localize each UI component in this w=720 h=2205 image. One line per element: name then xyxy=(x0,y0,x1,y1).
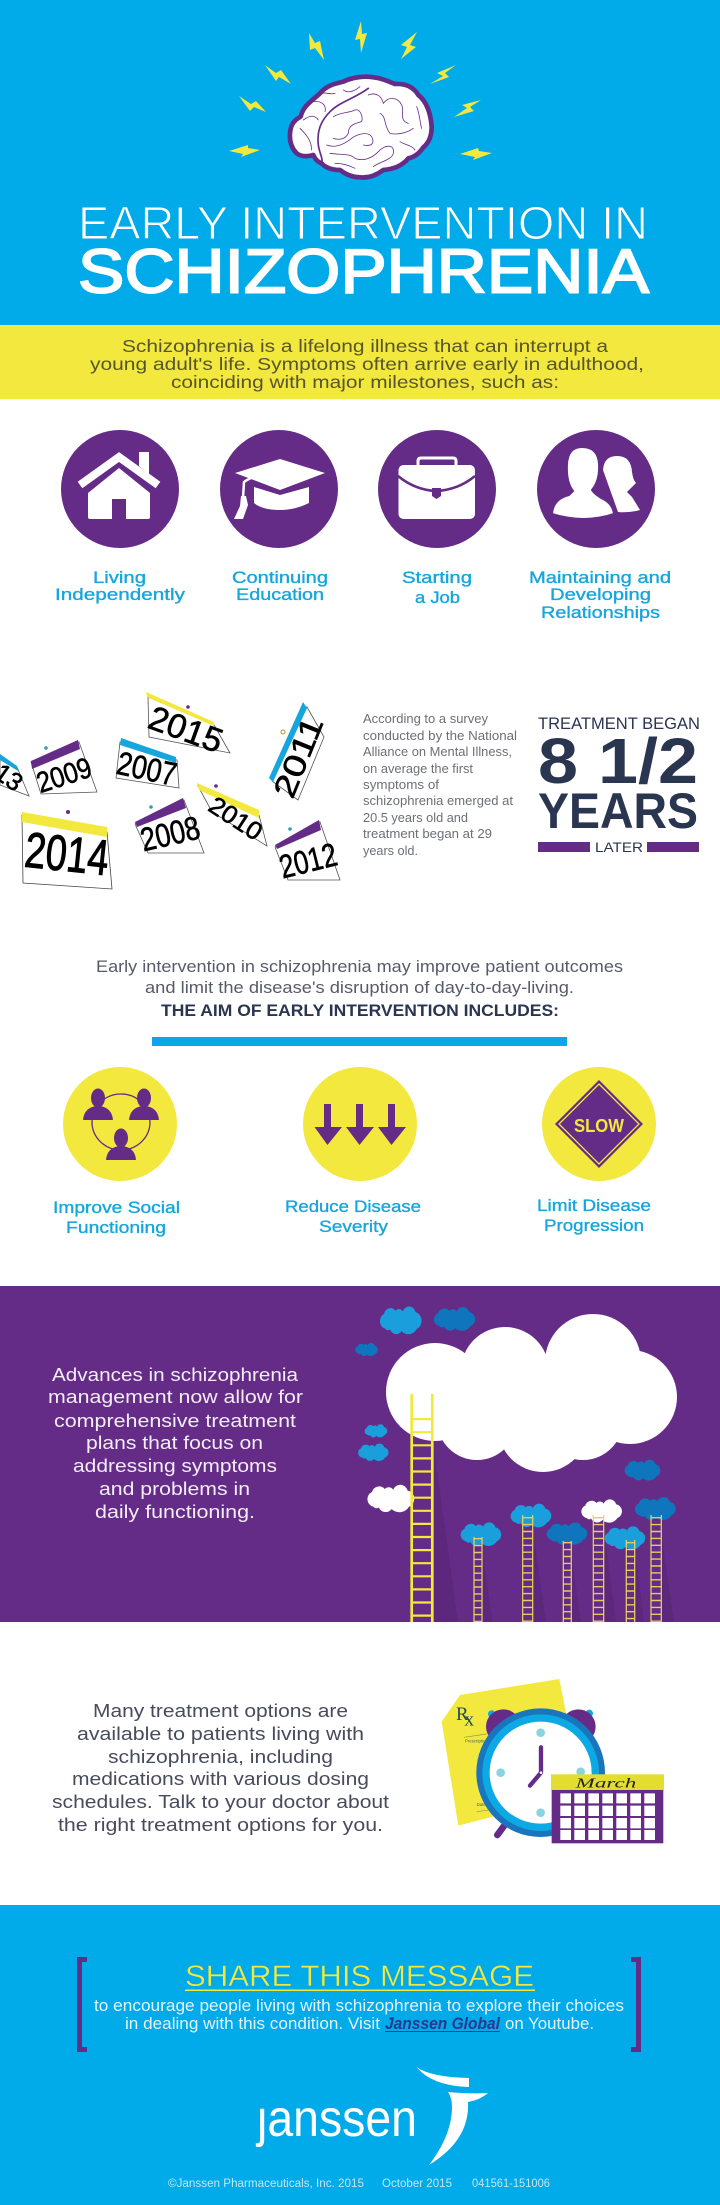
aim labels: Improve Social xyxy=(53,1198,180,1217)
illustration: ladder shadows xyxy=(433,1440,674,1622)
share text: on Youtube. xyxy=(505,2014,594,2033)
treatment options text: available to patients living with xyxy=(77,1724,364,1744)
panel: intro banner xyxy=(0,325,720,399)
panel: share message footer xyxy=(0,1905,720,2205)
logo: janssen xyxy=(255,2067,488,2165)
survey text: Alliance on Mental Illness, xyxy=(363,744,512,759)
month calendar: March xyxy=(574,1776,636,1791)
treatment options text: schizophrenia, including xyxy=(108,1747,333,1767)
milestone labels: Starting xyxy=(402,569,472,587)
calendar 2014: 2014 xyxy=(22,822,112,886)
panel: milestones xyxy=(55,430,671,622)
footer legal line: 041561-151006 xyxy=(472,2178,550,2190)
icon: house xyxy=(61,430,179,548)
alarm clock xyxy=(476,1708,605,1837)
milestone labels: a Job xyxy=(415,589,460,607)
share text: Janssen Global xyxy=(385,2014,501,2033)
intro text: Schizophrenia is a lifelong illness that can interrupt a xyxy=(122,336,608,356)
brackets xyxy=(80,1960,638,2050)
survey text: conducted by the National xyxy=(363,728,517,743)
calendar 2015: 2015 xyxy=(143,699,228,761)
logo: janssen: janssen xyxy=(255,2090,417,2148)
calendar 2008: 2008 xyxy=(137,809,204,858)
illustration: prescription, clock and calendar xyxy=(442,1679,664,1843)
aim labels: Progression xyxy=(544,1216,644,1235)
treatment options text: schedules. Talk to your doctor about xyxy=(52,1792,389,1812)
treatment options text: medications with various dosing xyxy=(72,1769,369,1789)
advances text: addressing symptoms xyxy=(73,1456,277,1476)
icon: down arrows xyxy=(303,1067,417,1181)
footer legal line xyxy=(168,2178,550,2190)
advances text: comprehensive treatment xyxy=(54,1411,296,1431)
share text: to encourage people living with schizophrenia to explore their choices xyxy=(94,1996,624,2015)
calendar 2011: 2011 xyxy=(267,712,330,803)
calendar 2007: 2007 xyxy=(114,744,180,793)
icon: briefcase xyxy=(378,430,496,548)
aim labels: Severity xyxy=(319,1217,389,1236)
aim labels: Limit Disease xyxy=(537,1196,651,1215)
footer legal line: October 2015 xyxy=(382,2178,452,2190)
calendar 2012 xyxy=(275,820,341,885)
prescription sheet: Prescription xyxy=(465,1739,488,1744)
aim labels: Reduce Disease xyxy=(285,1197,421,1216)
advances text: management now allow for xyxy=(48,1387,303,1407)
panel: header xyxy=(0,0,720,325)
survey text xyxy=(363,711,517,858)
survey text: schizophrenia emerged at xyxy=(363,793,513,808)
icon: graduation cap xyxy=(220,430,338,548)
prescription sheet xyxy=(442,1679,582,1826)
calendar 2011 xyxy=(267,702,330,803)
intro text xyxy=(90,336,644,392)
share heading: SHARE THIS MESSAGE xyxy=(185,1960,534,1993)
title xyxy=(78,197,650,306)
calendar 2009: 2009 xyxy=(33,752,96,800)
survey text: on average the first xyxy=(363,761,473,776)
milestone labels: Maintaining and xyxy=(529,569,671,587)
illustration: tall ladder xyxy=(412,1394,432,1622)
footer legal line: ©Janssen Pharmaceuticals, Inc. 2015 xyxy=(168,2178,364,2190)
illustration: short ladders xyxy=(474,1515,661,1622)
survey text: years old. xyxy=(363,843,418,858)
aim labels: Functioning xyxy=(66,1218,166,1237)
milestone labels: Relationships xyxy=(541,604,660,622)
icon: brain xyxy=(290,77,432,177)
advances text: and problems in xyxy=(99,1479,250,1499)
illustration: small clouds xyxy=(355,1306,676,1549)
calendar 2014 xyxy=(22,810,112,889)
panel: aims xyxy=(53,1067,656,1237)
title: SCHIZOPHRENIA xyxy=(78,238,650,306)
advances text xyxy=(48,1365,303,1522)
stat: treatment began 8 1/2 years later: 8 1/2 xyxy=(538,725,698,797)
illustration: big cloud xyxy=(386,1314,677,1472)
month calendar xyxy=(551,1774,664,1843)
intro text: young adult's life. Symptoms often arrive early in adulthood, xyxy=(90,354,644,374)
survey text: symptoms of xyxy=(363,777,439,792)
prescription sheet: R xyxy=(456,1704,469,1725)
milestone labels xyxy=(55,569,671,622)
intro text: coinciding with major milestones, such as: xyxy=(171,372,559,392)
share text xyxy=(94,1996,624,2033)
icon: slow sign xyxy=(542,1067,656,1181)
milestone labels: Living xyxy=(93,569,146,587)
panel: scattered year calendars xyxy=(0,692,341,889)
title: EARLY INTERVENTION IN xyxy=(78,197,648,249)
advances text: Advances in schizophrenia xyxy=(52,1365,299,1385)
stat: treatment began 8 1/2 years later: YEARS xyxy=(538,783,698,839)
early intervention statement: THE AIM OF EARLY INTERVENTION INCLUDES: xyxy=(161,1001,559,1020)
treatment options text: the right treatment options for you. xyxy=(58,1815,383,1835)
calendar 2010: 2010 xyxy=(204,791,267,846)
icon: two people xyxy=(537,430,655,548)
treatment options text xyxy=(52,1701,389,1835)
survey text: 20.5 years old and xyxy=(363,810,468,825)
survey text: treatment began at 29 xyxy=(363,826,492,841)
milestone labels: Education xyxy=(236,586,324,604)
treatment options text: Many treatment options are xyxy=(93,1701,348,1721)
icon: slow sign: SLOW xyxy=(574,1115,624,1136)
icon: lightning bolts xyxy=(229,21,492,160)
aim labels xyxy=(53,1196,651,1237)
prescription sheet: x xyxy=(464,1710,474,1731)
early intervention statement: Early intervention in schizophrenia may improve patient outcomes xyxy=(96,957,623,976)
calendar 2012: 2012 xyxy=(276,836,341,885)
share text: in dealing with this condition. Visit xyxy=(125,2014,380,2033)
icon: connected people xyxy=(63,1067,177,1181)
panel: advances in management xyxy=(0,1286,720,1622)
stat: treatment began 8 1/2 years later xyxy=(538,714,700,855)
milestone labels: Developing xyxy=(550,586,651,604)
advances text: plans that focus on xyxy=(86,1433,263,1453)
prescription sheet: Date xyxy=(477,1802,486,1807)
survey text: According to a survey xyxy=(363,711,488,726)
stat: treatment began 8 1/2 years later: TREATMENT BEGAN xyxy=(538,714,700,733)
milestone labels: Independently xyxy=(55,586,186,604)
early intervention statement xyxy=(96,957,623,1020)
stat: treatment began 8 1/2 years later: LATER xyxy=(595,839,643,855)
milestone labels: Continuing xyxy=(232,569,328,587)
early intervention statement: and limit the disease's disruption of day-to-day-living. xyxy=(145,978,574,997)
advances text: daily functioning. xyxy=(95,1502,255,1522)
